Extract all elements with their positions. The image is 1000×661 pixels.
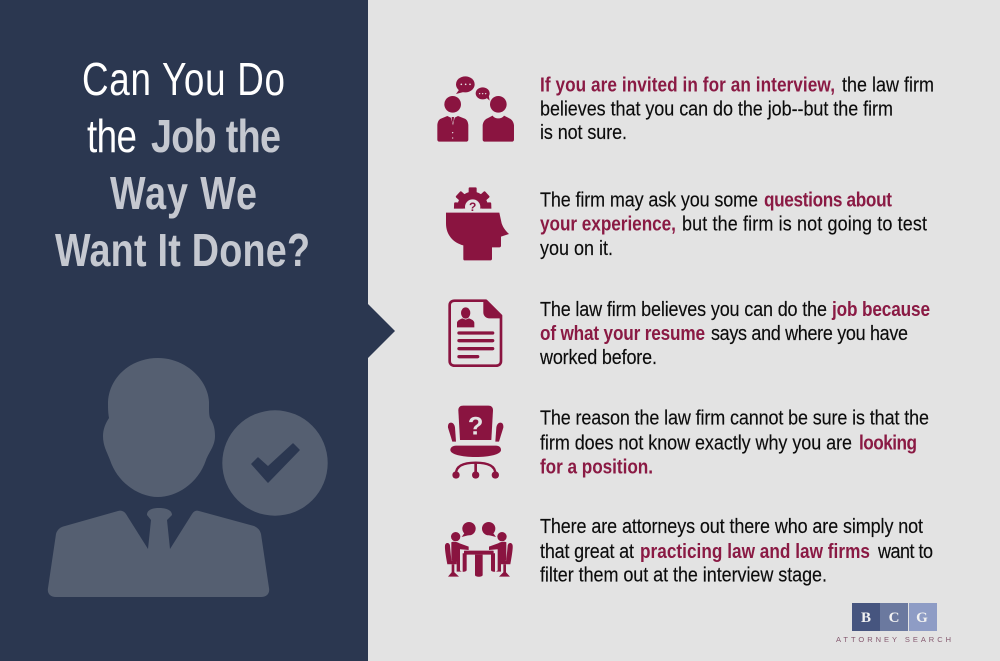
text block 3: of what your resume [540,322,705,344]
text block 2: questions about [764,188,892,211]
text block 4: looking [859,431,917,454]
text block 1: the law firm [842,75,934,97]
text block 5: want to [877,541,933,563]
text block 4: The reason the law firm cannot be sure is that the [540,408,929,430]
title: Way We [110,167,257,219]
logo: BCG Attorney Search: G [916,610,928,626]
icon: office chair with question mark: ? [468,412,483,440]
logo: BCG Attorney Search: B [861,610,871,626]
title: Want It Done? [55,224,310,276]
text block 3: job because [831,298,930,320]
text block 3: worked before. [539,347,657,369]
title: the [87,110,137,162]
text block 2: but the firm is not going to test [682,214,928,236]
icon: person with check mark [48,358,328,597]
text block 4: for a position. [540,455,653,478]
text block 2: your experience, [540,212,676,235]
text block 4: firm does not know exactly why you are [540,433,852,455]
text block 1: If you are invited in for an interview, [540,73,835,96]
text block 3: says and where you have [711,323,908,345]
text block 5: that great at [540,541,635,563]
icon: head with gear: ? [469,200,476,214]
logo: BCG Attorney Search: ATTORNEY SEARCH [836,635,951,644]
text block 2: you on it. [540,238,613,260]
text block 3 [539,298,930,369]
text block 2: The firm may ask you some [540,190,758,212]
title: Can You Do [82,53,285,105]
text block 5: practicing law and law firms [640,540,870,562]
icon: resume document [450,301,502,366]
icon: interview conversation [437,76,514,142]
icon: office chair with question mark [448,406,503,479]
text block 1: believes that you can do the job--but the firm [540,99,893,121]
left navy panel [0,0,395,661]
title [55,53,310,276]
text block 5 [540,516,933,587]
text block 3: The law firm believes you can do the [540,299,827,321]
icon: head with gear [446,187,509,260]
text block 1: is not sure. [540,122,627,144]
text block 5: There are attorneys out there who are simply not [540,516,924,538]
text block 2 [540,188,928,260]
text block 5: filter them out at the interview stage. [540,565,827,587]
icon: meeting at a table [445,522,513,577]
title: Job the [151,110,281,162]
text block 4 [540,408,929,478]
logo: BCG Attorney Search [836,603,951,644]
text block 1 [540,73,934,144]
logo: BCG Attorney Search: C [889,610,899,626]
